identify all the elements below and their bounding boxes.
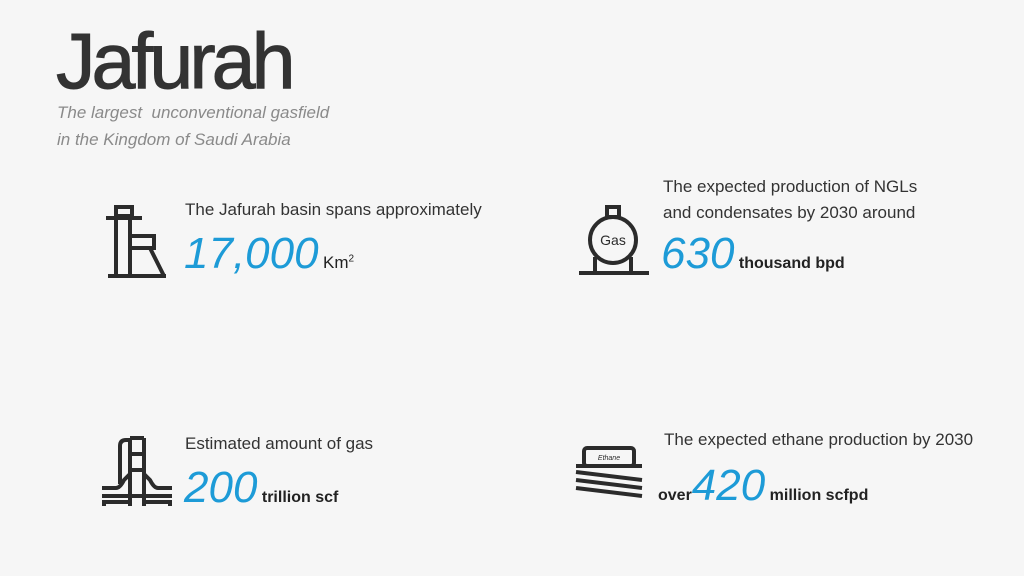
panel: ethane production — [576, 430, 973, 510]
text — [663, 177, 917, 222]
number: over420 million scfpd — [658, 461, 868, 510]
subtitle — [57, 103, 330, 149]
panel: NGL production — [579, 177, 917, 278]
icon: ethane plant — [576, 446, 642, 498]
icon: gas tank — [579, 205, 649, 275]
icon: tower — [106, 205, 166, 278]
icon: rig — [102, 436, 172, 506]
text: The expected ethane production by 2030 — [664, 430, 973, 449]
number: 200 trillion scf — [184, 463, 338, 512]
text: The Jafurah basin spans approximately — [185, 200, 482, 219]
icon: ethane plant: Ethane — [598, 455, 620, 462]
panel: gas amount — [102, 434, 373, 512]
subtitle: in the Kingdom of Saudi Arabia — [57, 130, 291, 149]
text: Estimated amount of gas — [185, 434, 373, 453]
title: Jafurah — [56, 16, 292, 105]
subtitle: The largest unconventional gasfield — [57, 103, 329, 122]
text: The expected production of NGLs — [663, 177, 917, 196]
number: 630 thousand bpd — [661, 229, 845, 278]
icon: gas tank: Gas — [600, 232, 626, 248]
panel: basin area — [106, 200, 482, 278]
text: and condensates by 2030 around — [663, 203, 915, 222]
number: 17,000 Km2 — [184, 229, 354, 278]
